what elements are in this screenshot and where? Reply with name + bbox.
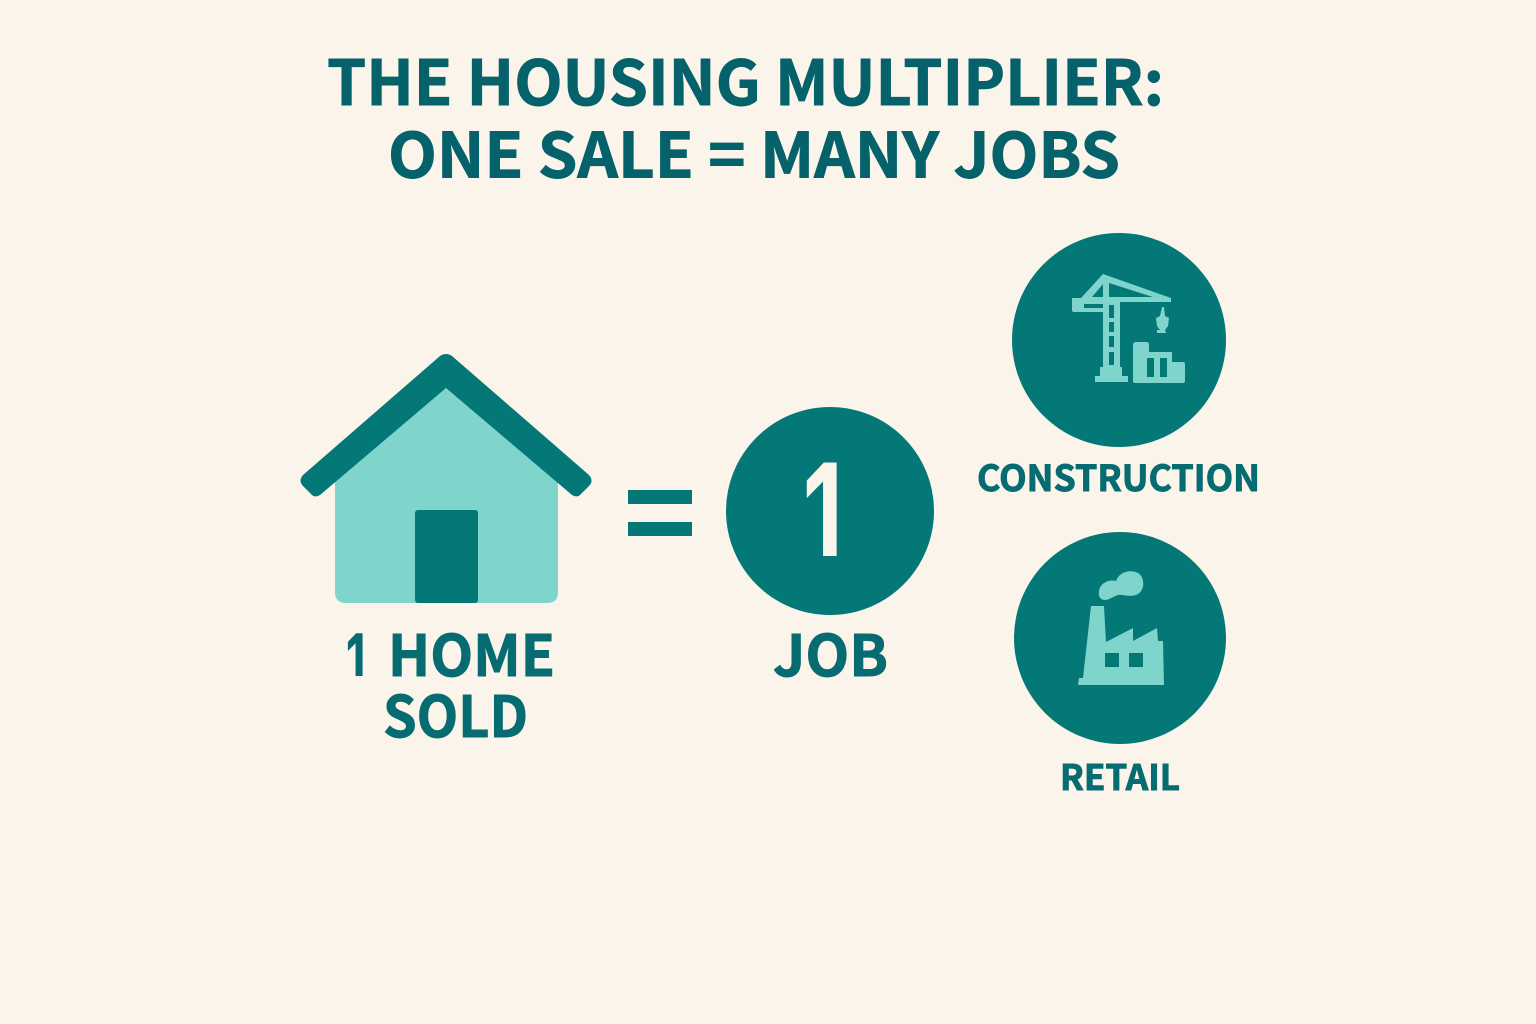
title: ONE SALE = MANY JOBS <box>388 106 1120 196</box>
equals sign <box>628 490 692 536</box>
job circle: 1 <box>800 429 855 609</box>
icon: house <box>300 354 592 603</box>
retail circle <box>1014 532 1226 744</box>
construction circle <box>1012 233 1226 447</box>
title: THE HOUSING MULTIPLIER: <box>327 33 1164 123</box>
label: job: JOB <box>773 611 888 693</box>
label: 1 home sold: 1 <box>345 619 371 702</box>
label: 1 home sold: HOME <box>388 611 555 693</box>
icon: factory <box>1078 571 1164 685</box>
title <box>327 33 1164 196</box>
label: 1 home sold <box>348 632 552 738</box>
icon: crane and building <box>1072 274 1185 383</box>
job circle <box>726 407 934 615</box>
label: construction: CONSTRUCTION <box>977 450 1260 502</box>
label: 1 home sold: SOLD <box>383 672 528 754</box>
label: retail: RETAIL <box>1060 750 1180 801</box>
